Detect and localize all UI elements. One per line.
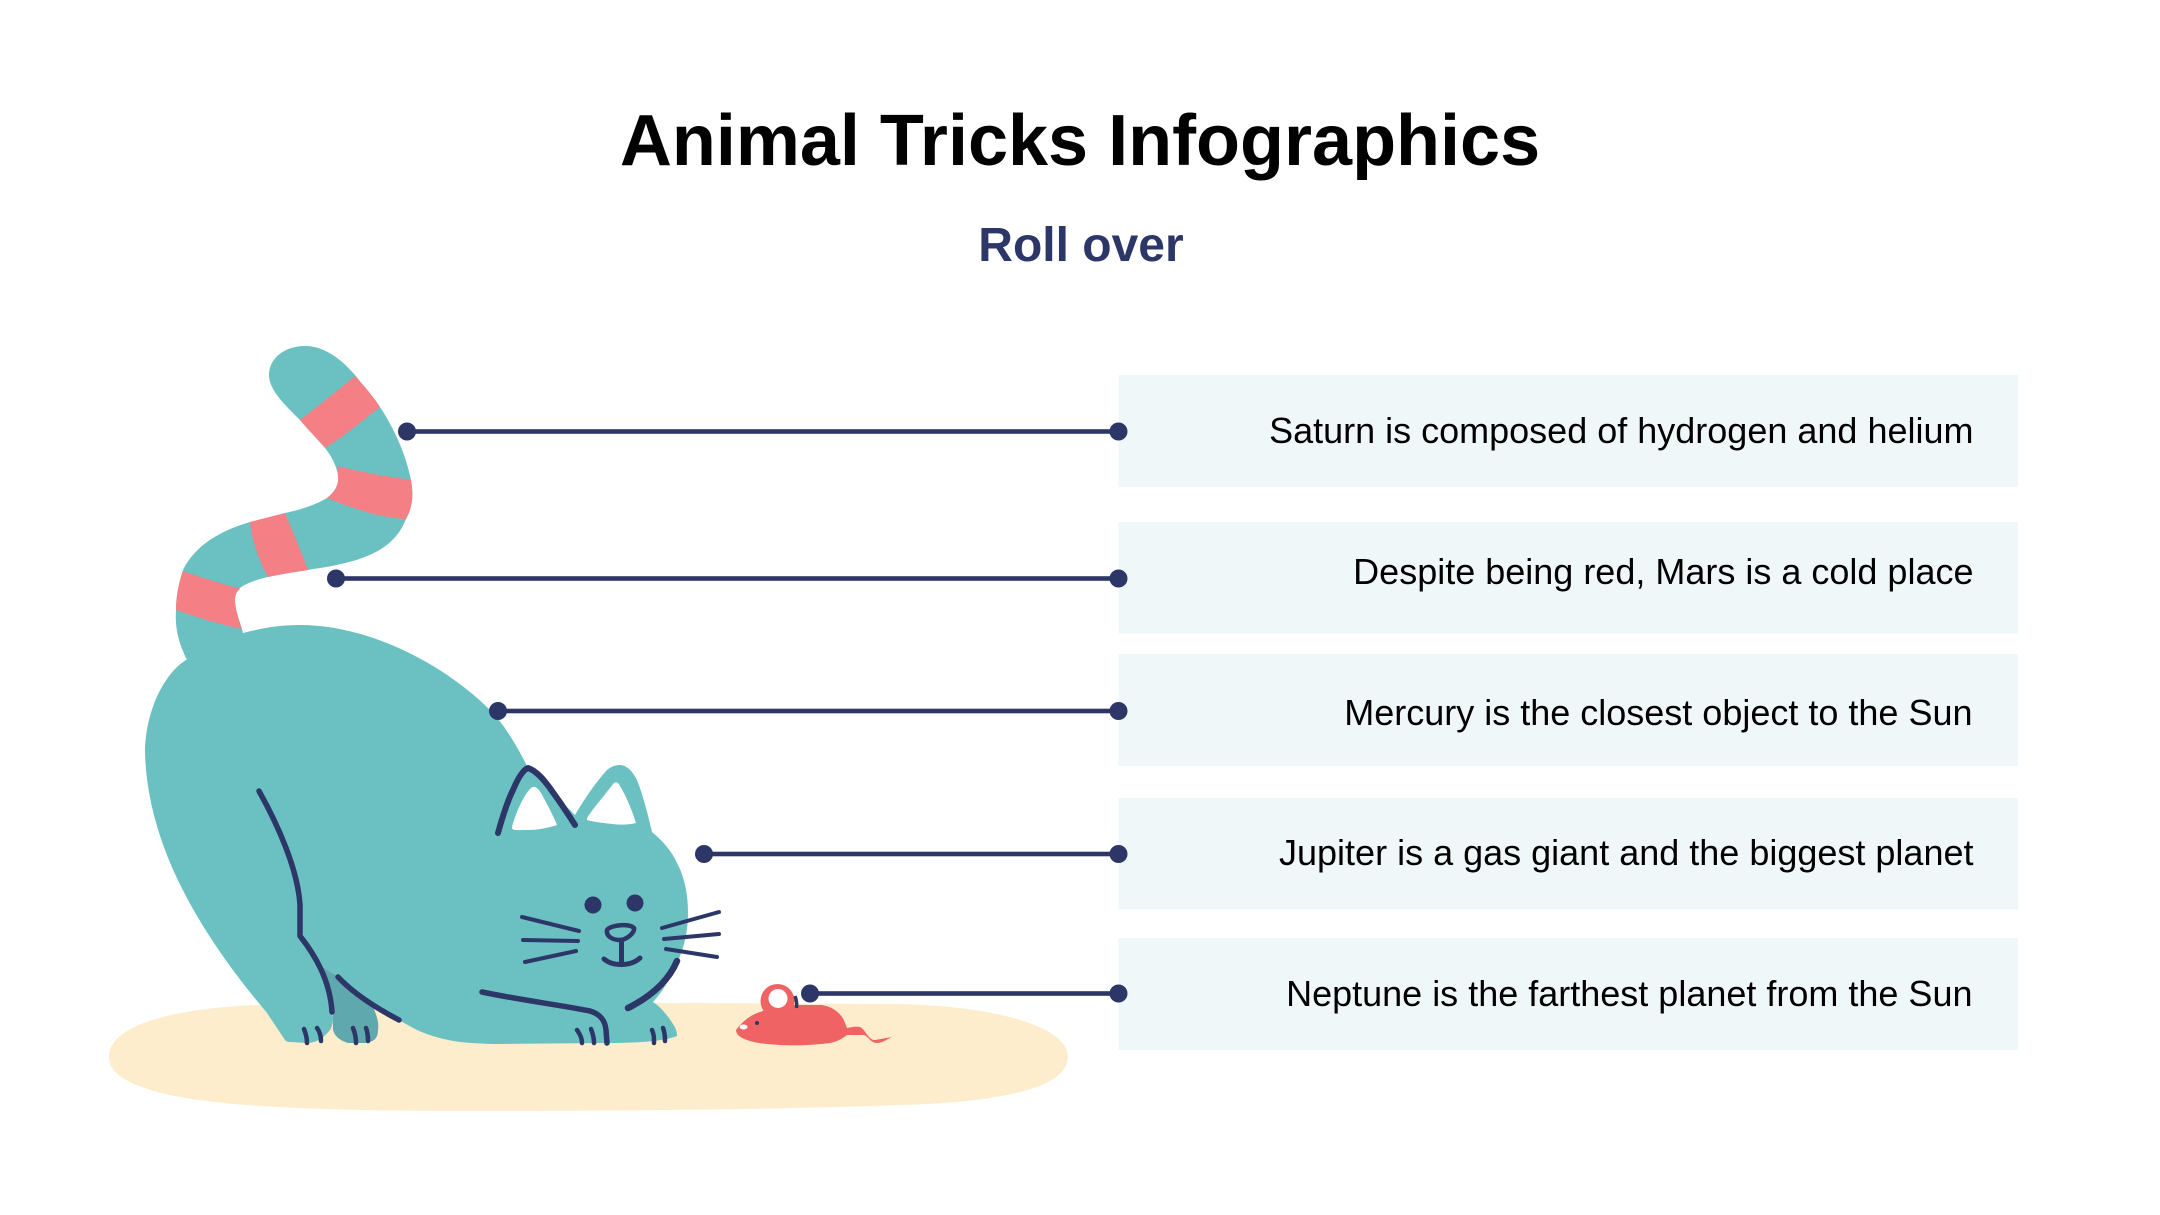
mouse [736, 984, 892, 1045]
connector: Jupiter [695, 845, 1128, 863]
panel: Mercury [1118, 654, 2018, 766]
mouse ear hole [768, 989, 788, 1008]
tail stripe 1 [300, 376, 380, 448]
panel: Saturn [1118, 375, 2018, 487]
title: Animal Tricks Infographics [620, 101, 1540, 181]
panel: Neptune: Neptune is the farthest planet from the Sun [1286, 973, 1972, 1014]
cat tail [176, 346, 412, 660]
panel: Mars [1118, 522, 2018, 634]
front arm line [482, 992, 607, 1043]
foreleg line [259, 791, 332, 1012]
mouse nose [740, 1024, 748, 1030]
connector: Mars [327, 570, 1128, 588]
tail stripe 2 [327, 466, 412, 519]
mouse ear [760, 984, 794, 1018]
panel: Jupiter [1118, 798, 2018, 910]
cat eyes [584, 894, 644, 914]
tail stripe 3 [250, 513, 308, 577]
rug [109, 1003, 1068, 1111]
connector: Saturn [398, 422, 1128, 440]
cat hind paw [323, 967, 378, 1043]
panel: Saturn: Saturn is composed of hydrogen and helium [1269, 410, 1974, 451]
nose [607, 925, 634, 940]
ear outline [498, 768, 575, 833]
mouse ear line [795, 996, 797, 1008]
subtitle: Roll over [978, 219, 1184, 272]
chin line [628, 961, 677, 1008]
cat ear inner left [512, 787, 557, 830]
panel: Neptune [1118, 938, 2018, 1050]
panel: Mercury: Mercury is the closest object to the Sun [1344, 692, 1972, 733]
connector: Mercury [489, 702, 1128, 720]
tail stripe 4 [176, 571, 242, 629]
cat outlines [259, 768, 719, 1043]
cat body and head [145, 625, 688, 1044]
panel: Mars: Despite being red, Mars is a cold place [1353, 551, 1974, 592]
panel: Jupiter: Jupiter is a gas giant and the biggest planet [1279, 832, 1974, 873]
mouse eye [755, 1021, 759, 1025]
mouse body [736, 1005, 892, 1045]
illustration: cat [145, 346, 719, 1044]
right whiskers [662, 912, 719, 957]
cat ear inner right [587, 782, 636, 825]
hind leg line [338, 977, 399, 1020]
connector: Neptune [801, 984, 1128, 1002]
mouth [604, 940, 640, 964]
left whiskers [522, 917, 579, 962]
toes [304, 1028, 665, 1043]
